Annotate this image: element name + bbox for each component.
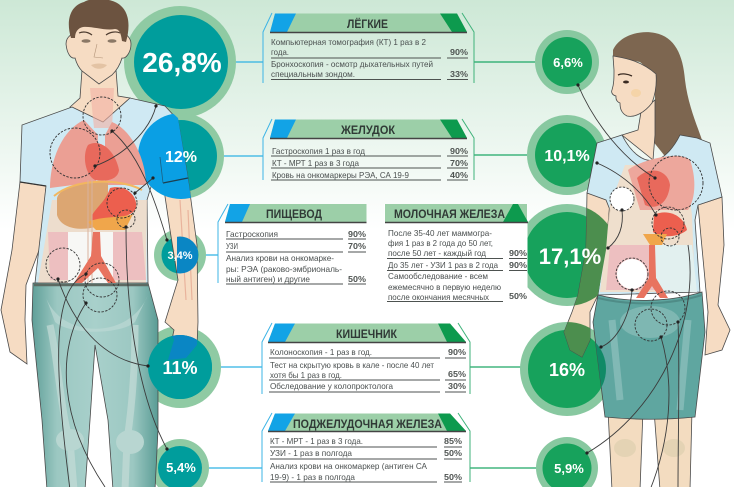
man blue sleeve overlay on circle bbox=[138, 114, 198, 274]
rows: stomach: Кровь на онкомаркеры РЭА, СА 19-9 bbox=[272, 170, 409, 180]
rows: esophagus bbox=[226, 229, 366, 284]
connector lines left bbox=[198, 62, 263, 468]
panel: intestine bbox=[262, 323, 470, 394]
rows: pancreas: 50% bbox=[444, 472, 462, 482]
circle: 3,4% bbox=[154, 229, 206, 281]
rows: pancreas: 85% bbox=[444, 436, 462, 446]
rows: esophagus: Анализ крови на онкомарке- bbox=[226, 253, 334, 263]
percentage labels: 26,8% bbox=[142, 47, 222, 78]
rows: breast bbox=[387, 228, 527, 302]
rows: breast: 90% bbox=[509, 248, 527, 258]
rows: pancreas: 50% bbox=[444, 448, 462, 458]
header: pancreas bbox=[268, 414, 466, 432]
rows: intestine: Тест на скрытую кровь в кале - после 40 лет bbox=[270, 360, 434, 370]
rows: pancreas: 19-9) - 1 раз в полгода bbox=[270, 472, 355, 482]
percentage labels bbox=[142, 47, 601, 476]
man dashed organ circles bbox=[46, 97, 137, 312]
rows: intestine: Обследование у колопроктолога bbox=[270, 381, 393, 391]
woman t-shirt bbox=[587, 135, 722, 295]
rows: esophagus: Гастроскопия bbox=[226, 229, 278, 239]
rows: intestine: 90% bbox=[448, 347, 466, 357]
woman leader lines bbox=[576, 83, 690, 490]
percentage labels: 12% bbox=[165, 149, 197, 166]
percentage labels: 10,1% bbox=[544, 148, 590, 165]
rows: breast: 50% bbox=[509, 291, 527, 301]
rows: pancreas: Анализ крови на онкомаркер (антиген СА bbox=[270, 461, 427, 471]
man pants bbox=[32, 283, 158, 490]
circle: 17,1% bbox=[516, 204, 618, 306]
percentage labels: 11% bbox=[162, 358, 198, 378]
rows: breast: после 50 лет - каждый год bbox=[388, 248, 486, 258]
woman green arm overlay bbox=[564, 200, 610, 357]
woman skirt bbox=[593, 292, 705, 419]
man leader lines bbox=[56, 104, 169, 490]
header: esophagus bbox=[225, 204, 366, 222]
rows: breast: ежемесячно в первую неделю bbox=[388, 282, 502, 292]
connector lines right bbox=[470, 62, 540, 468]
rows: breast: после окончания месячных bbox=[388, 292, 490, 302]
woman hair bbox=[613, 32, 702, 160]
rows: intestine: 30% bbox=[448, 381, 466, 391]
woman neck and face bbox=[612, 56, 656, 160]
man circle 11% over pants bbox=[148, 335, 212, 399]
rows: esophagus: ный антиген) и другие bbox=[226, 274, 310, 284]
rows: lungs: Компьютерная томография (КТ) 1 раз в 2 bbox=[271, 37, 426, 47]
panel: pancreas bbox=[262, 413, 470, 482]
panel: breast bbox=[384, 204, 528, 308]
panel: stomach bbox=[263, 119, 474, 180]
rows: breast: фия 1 раз в 2 года до 50 лет, bbox=[388, 238, 493, 248]
rows: stomach: КТ - МРТ 1 раз в 3 года bbox=[272, 158, 359, 168]
percentage labels: 5,4% bbox=[166, 460, 196, 475]
header: breast bbox=[385, 204, 528, 222]
rows: lungs: 33% bbox=[450, 69, 468, 79]
woman arms bbox=[564, 193, 730, 357]
header: pancreas: ПОДЖЕЛУДОЧНАЯ ЖЕЛЕЗА bbox=[293, 417, 442, 431]
rows: pancreas bbox=[270, 436, 462, 482]
woman legs bbox=[608, 410, 692, 490]
rows: esophagus: 50% bbox=[348, 274, 366, 284]
bottom white crop strip bbox=[0, 487, 734, 490]
rows: breast: Самообследование - всем bbox=[388, 271, 488, 281]
circle: 11% bbox=[139, 326, 221, 408]
rows: pancreas: УЗИ - 1 раз в полгода bbox=[270, 448, 352, 458]
circle: 26,8% bbox=[124, 6, 236, 118]
circle: 10,1% bbox=[527, 115, 607, 195]
rows: breast: 90% bbox=[509, 260, 527, 270]
rows: pancreas: КТ - МРТ - 1 раз в 3 года. bbox=[270, 436, 363, 446]
figure: man bbox=[1, 0, 212, 490]
woman organs bbox=[606, 156, 697, 298]
header: lungs bbox=[270, 14, 467, 32]
header: stomach bbox=[270, 120, 467, 138]
circle: 12% bbox=[138, 113, 224, 199]
circle: 16% bbox=[520, 322, 614, 416]
background bbox=[0, 0, 734, 230]
rows: lungs bbox=[271, 37, 468, 80]
circle: 5,9% bbox=[536, 437, 598, 490]
figure: woman bbox=[564, 32, 730, 490]
rows: lungs: специальным зондом. bbox=[271, 69, 355, 79]
percentage labels: 6,6% bbox=[553, 55, 583, 70]
percentage labels: 17,1% bbox=[539, 244, 601, 269]
rows: stomach: 70% bbox=[450, 158, 468, 168]
header: breast: МОЛОЧНАЯ ЖЕЛЕЗА bbox=[394, 207, 505, 221]
rows: esophagus: ры: РЭА (раково-эмбриональ- bbox=[226, 264, 342, 274]
rows: esophagus: 90% bbox=[348, 229, 366, 239]
rows: breast: После 35-40 лет маммогра- bbox=[388, 228, 492, 238]
man t-shirt bbox=[20, 88, 188, 283]
circle: 5,4% bbox=[151, 439, 209, 490]
header: stomach: ЖЕЛУДОК bbox=[340, 123, 396, 137]
rows: intestine bbox=[269, 347, 466, 392]
rows: intestine: 65% bbox=[448, 369, 466, 379]
rows: stomach: 90% bbox=[450, 146, 468, 156]
circle: 6,6% bbox=[535, 30, 599, 94]
man neck and head bbox=[66, 0, 131, 124]
header: lungs: ЛЁГКИЕ bbox=[347, 16, 388, 31]
rows: esophagus: УЗИ bbox=[226, 241, 238, 251]
panel: esophagus bbox=[218, 204, 366, 284]
rows: breast: До 35 лет - УЗИ 1 раз в 2 года bbox=[388, 260, 498, 270]
rows: stomach bbox=[271, 146, 468, 180]
header: intestine bbox=[268, 324, 466, 342]
header: intestine: КИШЕЧНИК bbox=[336, 327, 398, 341]
panel: lungs bbox=[263, 13, 474, 83]
percentage labels: 16% bbox=[549, 360, 585, 380]
header: esophagus: ПИЩЕВОД bbox=[266, 207, 322, 221]
rows: intestine: хотя бы 1 раз в год. bbox=[270, 370, 342, 380]
rows: stomach: Гастроскопия 1 раз в год bbox=[272, 146, 365, 156]
percentage labels: 3,4% bbox=[167, 250, 193, 262]
rows: lungs: 90% bbox=[450, 47, 468, 57]
rows: stomach: 40% bbox=[450, 170, 468, 180]
percentage labels: 5,9% bbox=[554, 461, 584, 476]
rows: lungs: года. bbox=[271, 47, 289, 57]
woman dashed organ circles bbox=[610, 156, 703, 341]
man arms bbox=[1, 178, 198, 364]
rows: intestine: Колоноскопия - 1 раз в год. bbox=[270, 347, 372, 357]
rows: esophagus: 70% bbox=[348, 241, 366, 251]
man organs bbox=[48, 120, 146, 283]
rows: lungs: Бронхоскопия - осмотр дыхательных путей bbox=[271, 59, 433, 69]
